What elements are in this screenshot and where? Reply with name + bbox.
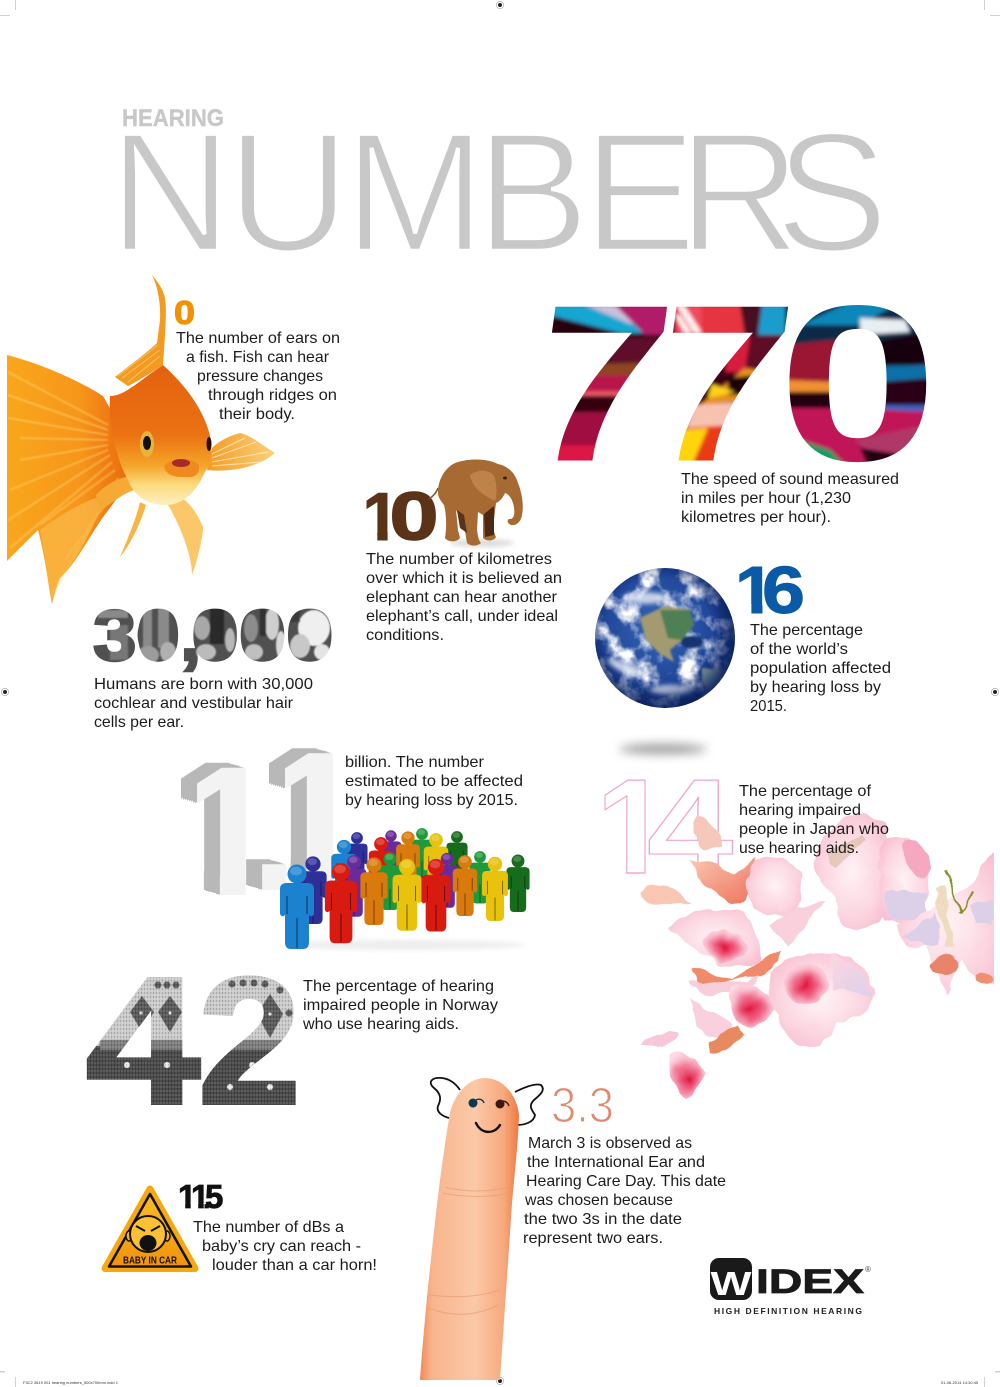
stat number: 16 bbox=[739, 566, 803, 614]
text: speed of sound: in miles per hour (1,230 bbox=[681, 490, 851, 507]
panel: globe, 16 percent bbox=[590, 553, 891, 754]
stat number: 16: 1 bbox=[735, 553, 775, 628]
panel: Norway, 42 percent bbox=[86, 941, 498, 1142]
logo: Widex: W bbox=[710, 1265, 753, 1302]
logo: Widex: IDEX bbox=[756, 1263, 864, 1301]
print slug text: 01-06-2014 14:30:45 bbox=[941, 1380, 979, 1385]
stat number: 1.1 with 3D extrusion: . bbox=[250, 733, 298, 927]
text: speed of sound: kilometres per hour). bbox=[681, 509, 831, 526]
text: Ear and Hearing Care Day: Hearing Care Day. This date bbox=[526, 1173, 726, 1190]
text: world population: 2015. bbox=[750, 698, 787, 715]
title word: NUMBERS bbox=[109, 98, 888, 288]
panel: elephant, 10 km bbox=[362, 460, 562, 644]
text: Norway hearing aids bbox=[302, 978, 498, 1033]
title kicker: HEARING bbox=[122, 105, 224, 132]
stat number: 770 bbox=[518, 260, 938, 508]
stat number: 10: 1 bbox=[362, 479, 399, 555]
text: hair cells: cochlear and vestibular hair bbox=[94, 695, 294, 712]
stat number: 14 outline bbox=[604, 780, 734, 874]
stat number: 1.1 with 3D extrusion: 1 bbox=[262, 713, 368, 925]
text: elephant call bbox=[366, 551, 562, 644]
text: Japan hearing aids: hearing impaired bbox=[739, 802, 861, 819]
text: ears on a fish: through ridges on bbox=[208, 387, 337, 404]
icon: baby in car warning sign: BABY IN CAR bbox=[123, 1256, 178, 1266]
text: Japan hearing aids: people in Japan who bbox=[739, 821, 889, 838]
stat number: 10: 0 bbox=[390, 478, 438, 554]
stat number: 10 bbox=[366, 491, 436, 541]
text: ears on a fish bbox=[176, 330, 340, 423]
stat number: 1.1 with 3D extrusion bbox=[181, 748, 333, 895]
stat number: 770: 0 bbox=[778, 260, 938, 508]
stat number: 14 outline: 4 bbox=[647, 751, 733, 902]
text: ears on a fish: pressure changes bbox=[197, 368, 323, 385]
icon: elephant bbox=[429, 460, 523, 547]
stat number: 770: 7 bbox=[518, 260, 684, 508]
panel: baby cry, 115 dB bbox=[105, 1178, 377, 1274]
text: elephant call: elephant can hear another bbox=[366, 589, 558, 606]
logo: Widex: HIGH DEFINITION HEARING bbox=[714, 1306, 862, 1316]
text: one point one billion: by hearing loss by 2015. bbox=[345, 792, 518, 809]
text: world population: by hearing loss by bbox=[750, 679, 881, 696]
text: Norway hearing aids: impaired people in Norway bbox=[303, 997, 498, 1014]
stat number: 30,000: 30, bbox=[93, 597, 202, 676]
panel: finger, 3.3 bbox=[420, 1078, 726, 1380]
text: baby cry bbox=[193, 1219, 377, 1274]
text: elephant call: over which it is believed an bbox=[366, 570, 562, 587]
stat number: 42 knit: 2 bbox=[198, 941, 301, 1142]
stat number: 30,000 bbox=[93, 597, 334, 676]
text: hair cells bbox=[94, 676, 313, 731]
panel: cherry blossom, 14 percent bbox=[604, 780, 994, 1099]
shadow under globe bbox=[619, 744, 707, 754]
text: Ear and Hearing Care Day: the two 3s in the date bbox=[524, 1211, 682, 1228]
text: baby cry: The number of dBs a bbox=[193, 1219, 344, 1236]
text: one point one billion bbox=[345, 754, 523, 809]
text: world population: The percentage bbox=[750, 622, 863, 639]
panel: 1.1 billion bbox=[181, 748, 530, 950]
icon: baby in car warning sign bbox=[105, 1189, 195, 1268]
text: ears on a fish: The number of ears on bbox=[176, 330, 340, 347]
text: ears on a fish: a fish. Fish can hear bbox=[186, 349, 330, 366]
print slug text bbox=[23, 1380, 979, 1385]
icon: finger with drawn face and ears bbox=[420, 1078, 543, 1380]
stat number: 14 outline: 1 bbox=[596, 751, 670, 902]
text: hair cells: Humans are born with 30,000 bbox=[94, 676, 313, 693]
fish eye bbox=[140, 431, 154, 457]
icon: goldfish bbox=[7, 275, 275, 604]
title bbox=[109, 98, 888, 288]
stat number: 30,000: 000 bbox=[192, 597, 334, 676]
logo: Widex: ® bbox=[865, 1265, 871, 1274]
text: world population: of the world’s bbox=[750, 641, 848, 658]
print slug text: F3C2 3619 001 hearing numbers_500x700mm.indd 1 bbox=[23, 1380, 119, 1385]
text: Ear and Hearing Care Day: represent two ears. bbox=[523, 1230, 663, 1247]
stat number: 770: 7 bbox=[639, 260, 805, 508]
stat number: 115: 115 bbox=[178, 1178, 223, 1215]
text: elephant call: conditions. bbox=[366, 627, 444, 644]
text: elephant call: elephant’s call, under ideal bbox=[366, 608, 558, 625]
panel: hair cells, 30,000 bbox=[93, 597, 334, 731]
text: hair cells: cells per ear. bbox=[94, 714, 184, 731]
text: Japan hearing aids: use hearing aids. bbox=[739, 840, 859, 857]
fish mouth bbox=[164, 459, 199, 477]
text: Ear and Hearing Care Day: was chosen because bbox=[524, 1192, 673, 1209]
stat number: 0: 0 bbox=[174, 294, 195, 331]
logo: Widex bbox=[710, 1258, 871, 1316]
text: Norway hearing aids: who use hearing aids. bbox=[302, 1016, 459, 1033]
text: world population bbox=[750, 622, 891, 715]
text: one point one billion: estimated to be affected bbox=[345, 773, 523, 790]
stat number: 1.1 with 3D extrusion: 1 bbox=[177, 729, 280, 935]
text: world population: population affected bbox=[750, 660, 891, 677]
text: baby cry: louder than a car horn! bbox=[212, 1257, 377, 1274]
text: speed of sound bbox=[681, 471, 899, 526]
text: one point one billion: billion. The number bbox=[345, 754, 485, 771]
text: Ear and Hearing Care Day bbox=[523, 1135, 726, 1247]
text: Ear and Hearing Care Day: the International Ear and bbox=[527, 1154, 705, 1171]
text: baby cry: baby’s cry can reach - bbox=[202, 1238, 361, 1255]
icon: cherry blossoms bbox=[640, 815, 1000, 1098]
stat number: 16: 6 bbox=[762, 553, 805, 628]
text: Ear and Hearing Care Day: March 3 is observed as bbox=[528, 1135, 692, 1152]
text: ears on a fish: their body. bbox=[219, 406, 295, 423]
icon: crowd of people bbox=[280, 828, 530, 950]
text: elephant call: The number of kilometres bbox=[366, 551, 552, 568]
panel: goldfish, zero ears bbox=[7, 275, 340, 604]
text: Norway hearing aids: The percentage of hearing bbox=[303, 978, 494, 995]
icon: earth globe bbox=[595, 568, 735, 708]
text: Japan hearing aids: The percentage of bbox=[739, 783, 872, 800]
face bbox=[468, 1098, 509, 1132]
stat number: 42 knit: 4 bbox=[86, 941, 200, 1142]
panel: speed of sound bbox=[518, 260, 938, 526]
text: Japan hearing aids bbox=[739, 783, 889, 857]
stat number: 3.3: 3.3 bbox=[551, 1079, 614, 1133]
text: speed of sound: The speed of sound measured bbox=[681, 471, 899, 488]
stat number: 42 knit bbox=[86, 941, 301, 1142]
